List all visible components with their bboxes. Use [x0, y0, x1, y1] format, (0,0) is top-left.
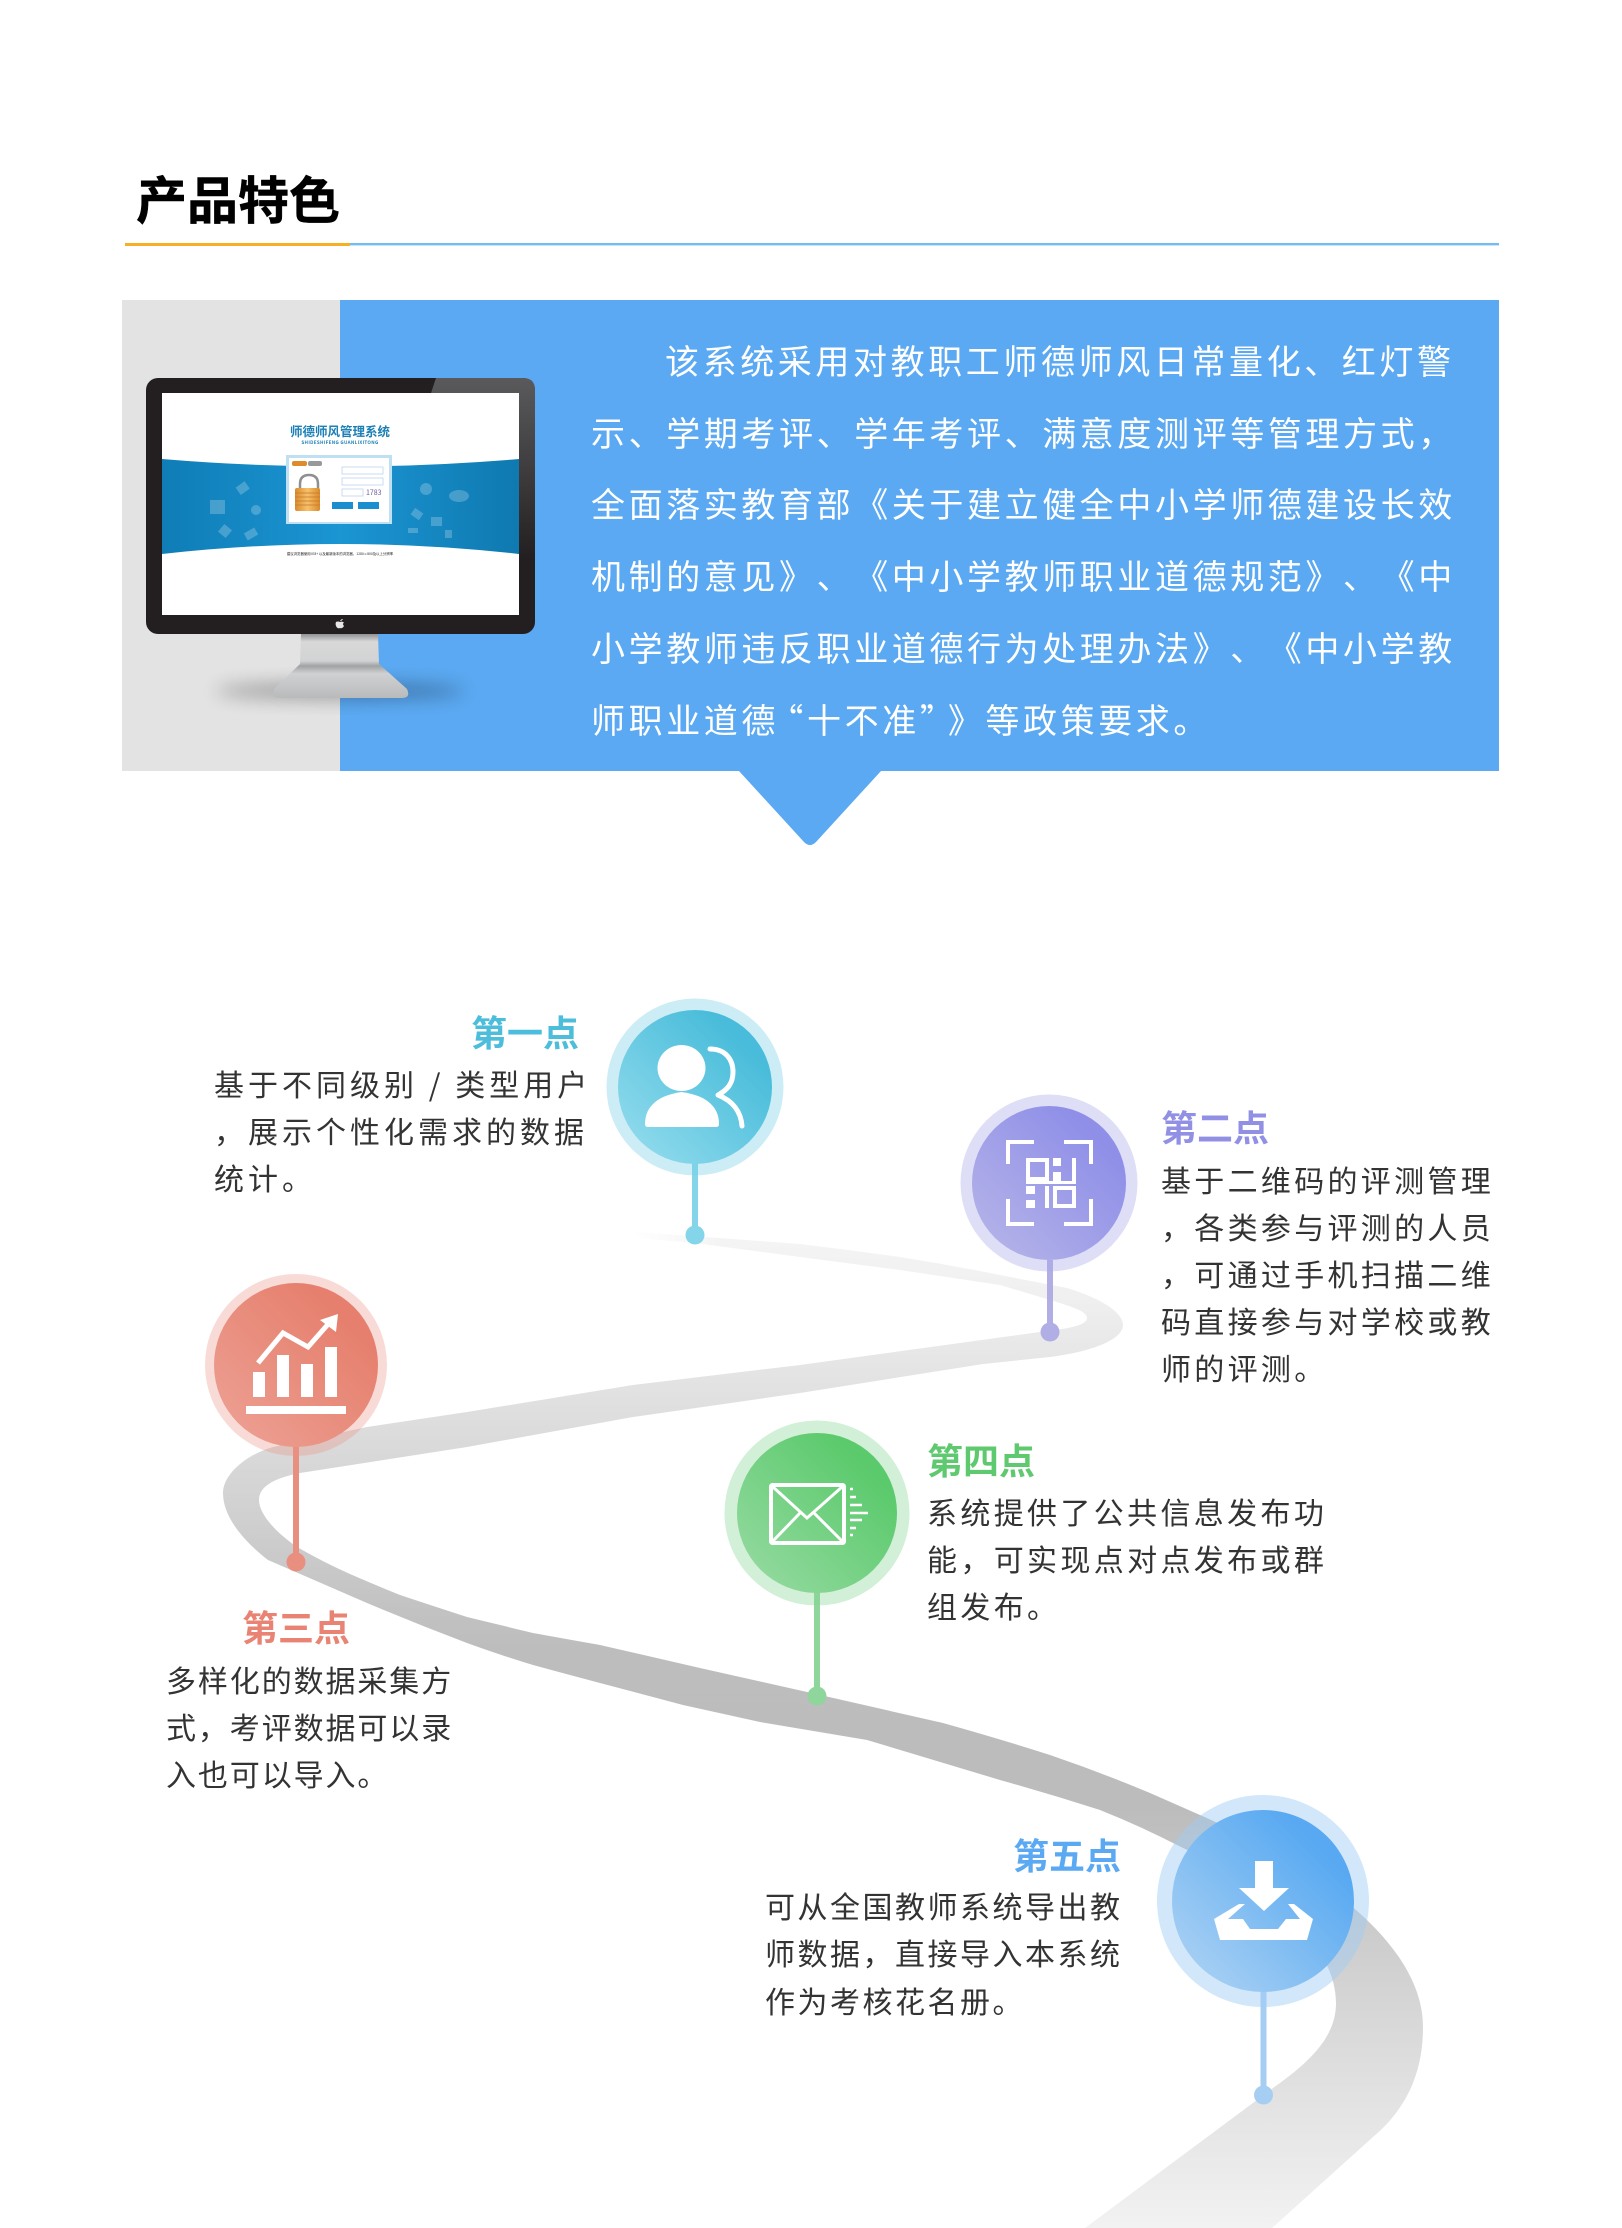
text 1 [214, 1061, 591, 1199]
intro paragraph [591, 335, 1456, 743]
marker 1 [606, 998, 784, 1244]
icon: rising bar chart [246, 1314, 346, 1414]
text 3 [166, 1657, 453, 1795]
text 3: 多样化的数据采集方 [166, 1657, 453, 1701]
text 4: 组发布。 [927, 1583, 1060, 1627]
monitor illustration: SHIDESHIFENG GUANLIXITONG [301, 440, 379, 446]
point 3 [166, 1274, 453, 1795]
point 1 [214, 998, 784, 1244]
text 2: 基于二维码的评测管理 [1161, 1157, 1494, 1201]
text 4 [927, 1489, 1327, 1627]
text 3: 入也可以导入。 [166, 1751, 389, 1795]
monitor illustration: 建议浏览器使用 IE8+ 以及最新版本的浏览器，1280×800及以上分辨率 [287, 551, 394, 556]
text 2: ，可通过手机扫描二维 [1161, 1251, 1494, 1295]
text 1: 统计。 [214, 1155, 316, 1199]
text 4: 能，可实现点对点发布或群 [927, 1536, 1327, 1580]
heading 4: 第四点 [927, 1433, 1035, 1485]
point 5 [765, 1795, 1369, 2104]
title underline [125, 243, 1499, 246]
title: 产品特色 [136, 160, 340, 234]
monitor illustration: 师德师风管理系统 [290, 421, 390, 440]
point 2 [960, 1094, 1494, 1389]
text 2: ，各类参与评测的人员 [1161, 1204, 1494, 1248]
icon: download tray [1214, 1861, 1313, 1940]
heading 1: 第一点 [471, 1005, 579, 1057]
monitor illustration [146, 378, 535, 699]
marker 4 [724, 1420, 910, 1706]
intro paragraph: 师职业道德“十不准”》等政策要求。 [591, 694, 1211, 743]
heading 5: 第五点 [1013, 1828, 1121, 1880]
marker 5 [1157, 1795, 1369, 2104]
blue panel with pointer [340, 300, 1499, 845]
text 3: 式，考评数据可以录 [166, 1704, 453, 1748]
panel: system introduction [122, 300, 1499, 845]
icon: QR code [1008, 1142, 1091, 1224]
intro paragraph: 机制的意见》、《中小学教师职业道德规范》、《中 [591, 550, 1456, 599]
heading 3: 第三点 [242, 1600, 350, 1652]
intro paragraph: 示、学期考评、学年考评、满意度测评等管理方式， [591, 407, 1456, 456]
winding road [223, 1225, 1423, 2228]
text 1: ，展示个性化需求的数据 [214, 1108, 588, 1152]
text 2: 师的评测。 [1161, 1345, 1328, 1389]
text 5: 作为考核花名册。 [765, 1978, 1025, 2022]
text 5: 师数据，直接导入本系统 [765, 1930, 1122, 1974]
heading 2: 第二点 [1161, 1100, 1269, 1152]
icon: users [645, 1045, 742, 1127]
monitor illustration: 1783 [366, 488, 382, 498]
grey panel background [122, 300, 340, 771]
icon: envelope [771, 1485, 868, 1543]
intro paragraph: 小学教师违反职业道德行为处理办法》、《中小学教 [591, 622, 1456, 671]
marker 3 [205, 1274, 387, 1572]
intro paragraph: 该系统采用对教职工师德师风日常量化、红灯警 [665, 335, 1455, 384]
text 1: 基于不同级别 / 类型用户 [214, 1061, 591, 1105]
text 2: 码直接参与对学校或教 [1161, 1298, 1494, 1342]
text 5 [765, 1883, 1122, 2022]
point 4 [724, 1420, 1327, 1706]
marker 2 [960, 1094, 1138, 1342]
text 5: 可从全国教师系统导出教 [765, 1883, 1122, 1927]
text 4: 系统提供了公共信息发布功 [927, 1489, 1327, 1533]
text 2 [1161, 1157, 1494, 1389]
intro paragraph: 全面落实教育部《关于建立健全中小学师德建设长效 [591, 478, 1456, 527]
